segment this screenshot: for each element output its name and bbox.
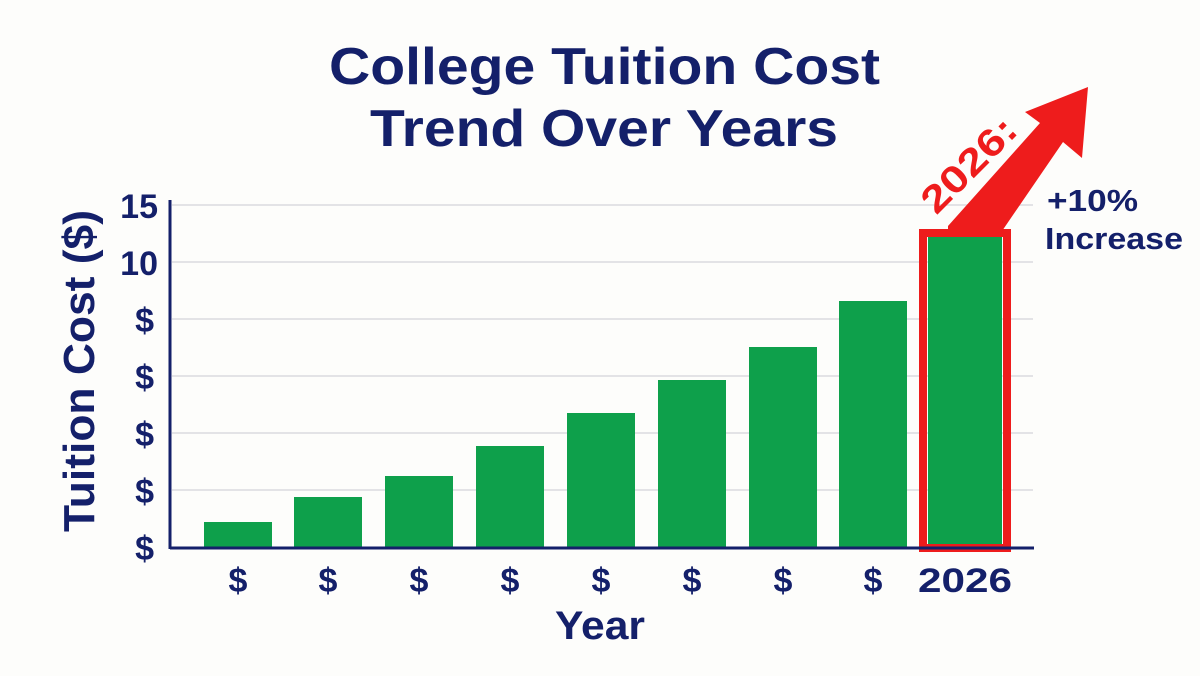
highlight box 2026: [923, 233, 1007, 548]
y-axis labels: $: [135, 302, 154, 340]
x-axis labels: 2026: [918, 562, 1012, 600]
x-axis labels: $: [774, 562, 793, 600]
x-axis labels: [229, 562, 1012, 600]
title: [329, 38, 880, 158]
callout: +10%: [1047, 183, 1138, 218]
axes: [170, 200, 1034, 549]
x-axis labels: $: [410, 562, 429, 600]
y-axis labels: [120, 188, 158, 568]
title: College Tuition Cost: [329, 38, 880, 96]
arrow label: 2026:: [913, 109, 1026, 222]
callout: [1045, 183, 1183, 256]
arrow: [913, 87, 1088, 234]
x-axis labels: $: [501, 562, 520, 600]
x-axis labels: $: [229, 562, 248, 600]
y-axis labels: $: [135, 473, 154, 511]
bar chart: [204, 236, 1002, 548]
x-axis labels: $: [683, 562, 702, 600]
y-axis labels: $: [135, 530, 154, 568]
y-axis labels: $: [135, 359, 154, 397]
y-axis labels: 10: [120, 245, 158, 283]
y-axis labels: $: [135, 416, 154, 454]
title: Trend Over Years: [370, 100, 838, 158]
x-axis labels: $: [319, 562, 338, 600]
y-axis labels: 15: [120, 188, 158, 226]
y-axis title: Tuition Cost ($): [55, 210, 104, 532]
x-axis labels: $: [592, 562, 611, 600]
x-axis labels: $: [864, 562, 883, 600]
x-axis title: Year: [555, 604, 645, 648]
callout: Increase: [1045, 221, 1183, 256]
